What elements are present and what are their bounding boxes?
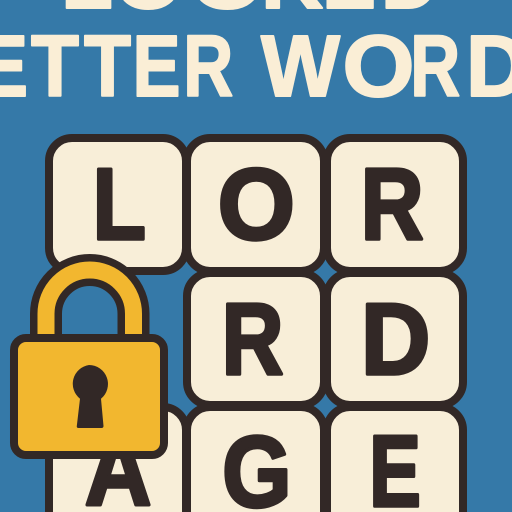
title: LETTER WORDS: O bbox=[342, 18, 414, 115]
letter tiles grid bbox=[49, 138, 463, 512]
tile: O bbox=[187, 138, 324, 271]
title: LETTER WORDS bbox=[0, 18, 512, 115]
tile: R top: R bbox=[361, 149, 424, 261]
title: LETTER WORDS: E bbox=[132, 18, 180, 115]
icon: padlock bbox=[14, 270, 164, 455]
tile: R middle: R bbox=[222, 284, 283, 396]
tile: D: D bbox=[361, 284, 430, 396]
tile: L: L bbox=[93, 149, 146, 261]
title: LOCKED bbox=[61, 0, 439, 27]
tile: E bbox=[327, 407, 463, 512]
tile: R middle bbox=[187, 273, 324, 405]
title: LETTER WORDS: R bbox=[410, 18, 460, 115]
title: LETTER WORDS: T bbox=[31, 18, 79, 115]
tile: L bbox=[49, 138, 186, 271]
tile: R top bbox=[327, 138, 463, 271]
padlock keyhole bbox=[73, 365, 108, 428]
tile: O: O bbox=[218, 149, 295, 261]
tile: A bbox=[49, 407, 186, 512]
tile: D bbox=[327, 273, 463, 405]
title: LETTER WORDS: W bbox=[261, 18, 341, 115]
title: LETTER WORDS: R bbox=[183, 18, 233, 115]
title: LETTER WORDS: T bbox=[84, 18, 131, 115]
padlock body bbox=[14, 338, 164, 455]
tile: G bbox=[187, 407, 324, 512]
padlock shackle bbox=[46, 270, 134, 336]
